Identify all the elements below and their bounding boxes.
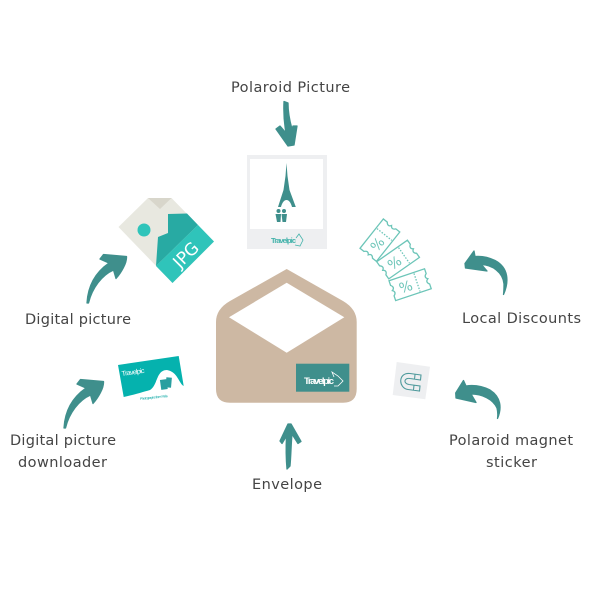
- card caption: Photographs from Paris: [140, 394, 168, 401]
- label: Polaroid Picture: Polaroid Picture: [231, 80, 350, 96]
- image circle: [138, 224, 150, 236]
- envelope: [216, 269, 357, 403]
- arrow: to digital picture: [87, 254, 127, 303]
- ticket 3: %: [397, 278, 415, 297]
- envelope stamp: Travelpic: [304, 376, 334, 387]
- arrow: to magnet sticker: [456, 380, 500, 418]
- label: Digital picture: Digital picture: [25, 312, 131, 328]
- arrow: to downloader: [64, 380, 104, 428]
- envelope stamp: [296, 364, 349, 392]
- card logo: Travelpic: [121, 368, 146, 378]
- label: Polaroid magnet sticker: [449, 433, 573, 471]
- image mountains: [156, 214, 198, 266]
- ticket 2: %: [385, 253, 405, 274]
- label: Envelope: Envelope: [252, 477, 322, 493]
- polaroid picture: [247, 155, 327, 249]
- arrow: to polaroid: [276, 102, 297, 146]
- label: Local Discounts: Local Discounts: [462, 311, 581, 327]
- JPG band: [156, 225, 214, 283]
- label: Polaroid magnet sticker: Polaroid magnet: [449, 433, 573, 449]
- arrow: to local discounts: [465, 251, 507, 294]
- digital picture downloader card: [118, 356, 184, 401]
- icon: Eiffel tower: [278, 163, 296, 207]
- JPG file icon: [118, 198, 214, 283]
- label: Digital picture downloader: downloader: [18, 455, 107, 471]
- magnet sticker: [393, 362, 430, 399]
- label: Polaroid magnet sticker: sticker: [486, 455, 537, 471]
- JPG text: JPG: [169, 238, 204, 273]
- icon: two people: [276, 209, 287, 222]
- arrow: to envelope: [280, 424, 301, 469]
- discount tickets: [360, 219, 431, 301]
- ticket 1: %: [368, 235, 389, 255]
- label: Digital picture downloader: [10, 433, 116, 471]
- polaroid logo: Travelpic: [271, 236, 296, 245]
- card photos: [160, 379, 168, 390]
- fold: [148, 198, 172, 209]
- icon: magnet: [401, 373, 421, 391]
- label: Digital picture downloader: Digital picture: [10, 433, 116, 449]
